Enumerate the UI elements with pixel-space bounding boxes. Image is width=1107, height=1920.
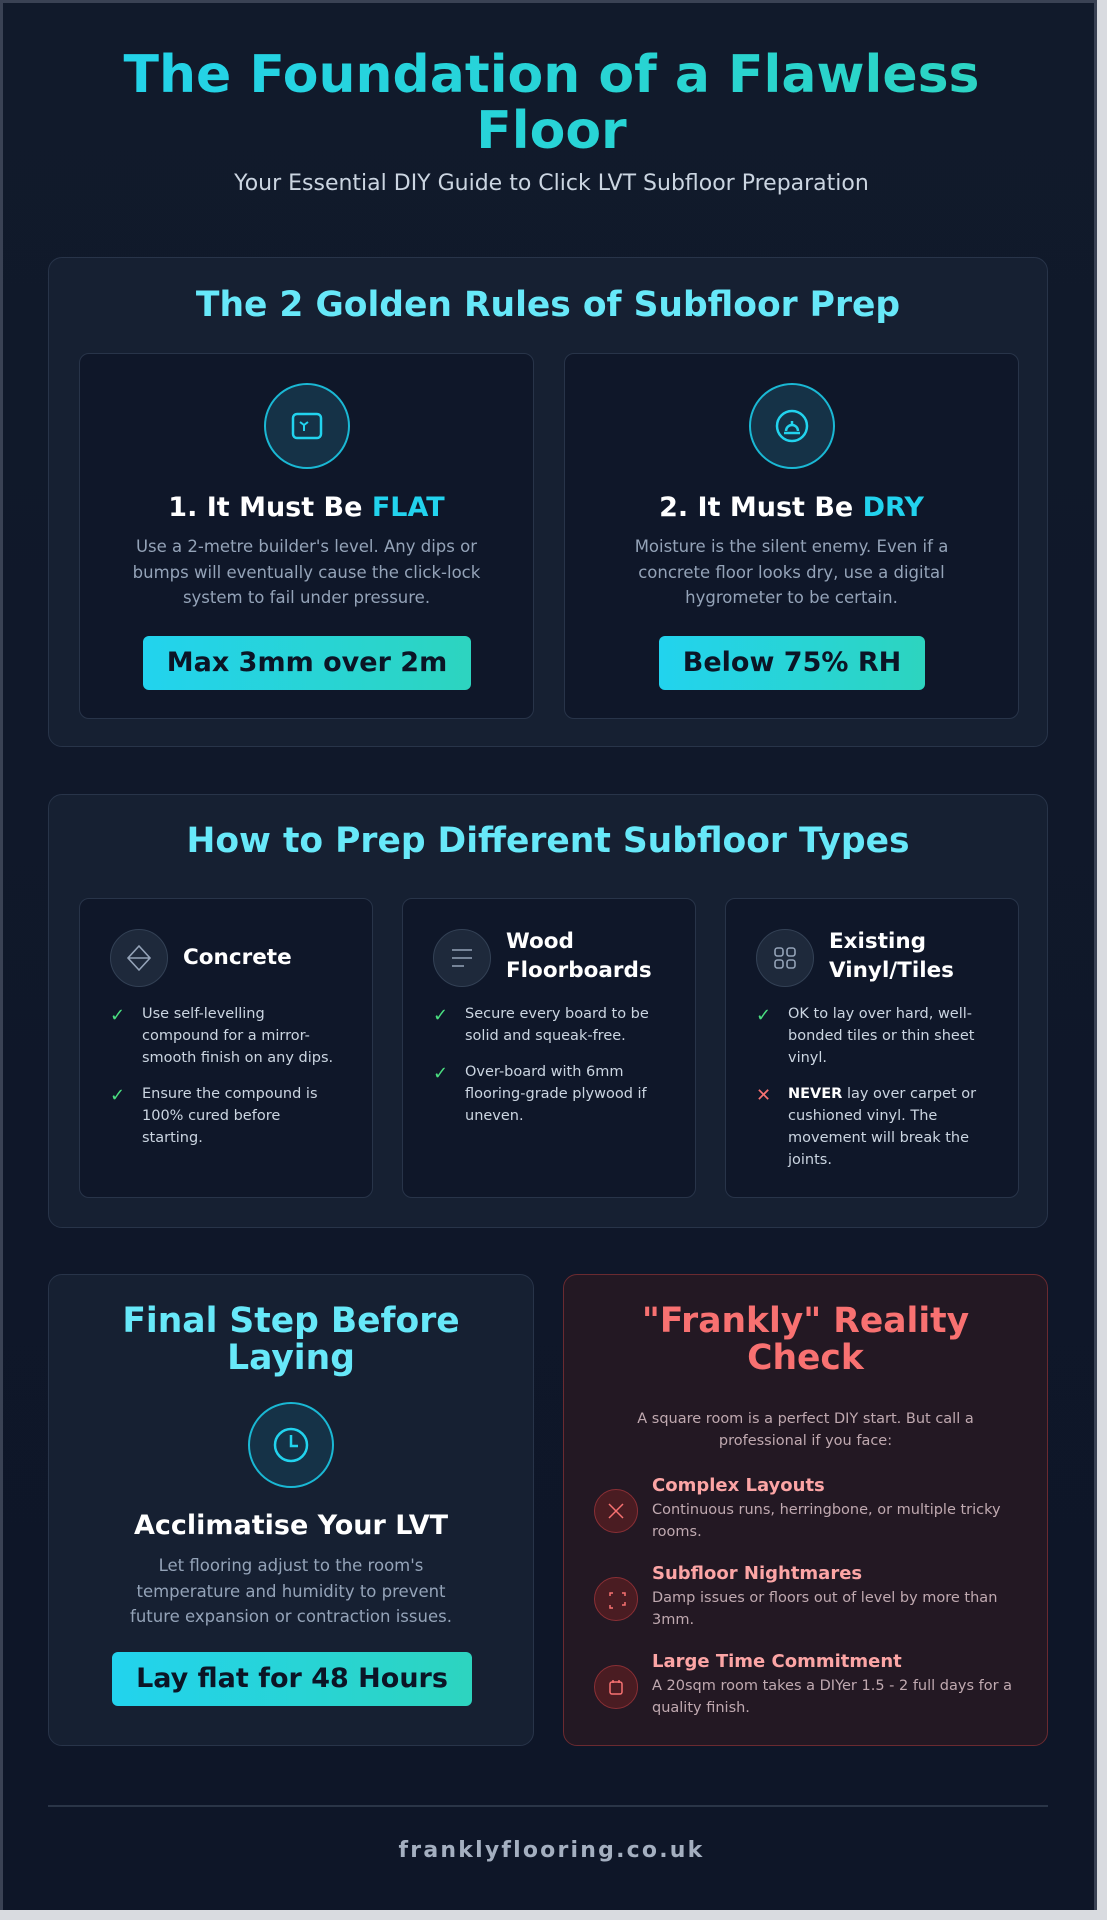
card: wood: ✓ (433, 1005, 448, 1026)
text: acclimatise: Let flooring adjust to the room's temperature and humidity to prevent future expansion or contraction issues. (130, 1556, 452, 1626)
card: dry (564, 353, 1019, 719)
title: vinyl: Vinyl/Tiles (829, 958, 954, 983)
heading: golden rules: The 2 Golden Rules of Subfloor Prep (196, 285, 900, 325)
item: Use self-levelling compound for a mirror-smooth finish on any dips. (142, 1006, 333, 1066)
heading: final step (122, 1301, 460, 1378)
icon: hygrometer (749, 383, 835, 469)
item: complex layouts: Continuous runs, herringbone, or multiple tricky rooms. (652, 1502, 1001, 1540)
badge: 75%: Below 75% RH (683, 647, 901, 678)
card: vinyl: ✕ (756, 1085, 771, 1106)
card: flat (79, 353, 534, 719)
card: concrete: ✓ (110, 1085, 125, 1106)
badge: 3mm: Max 3mm over 2m (167, 647, 447, 678)
card: concrete (79, 898, 373, 1198)
title (3, 47, 1100, 159)
item: time commitment (594, 1651, 1012, 1716)
badge: 3mm (143, 636, 471, 690)
item: Secure every board to be solid and squeak-free. (465, 1006, 649, 1044)
title: Floor (476, 101, 627, 161)
text: flat: Use a 2-metre builder's level. Any dips or bumps will eventually cause the click-lock system to fail under pressure. (133, 537, 480, 607)
title: wood (506, 929, 652, 983)
item: complex layouts: Complex Layouts (652, 1475, 825, 1496)
item: time commitment: A 20sqm room takes a DIYer 1.5 - 2 full days for a quality finish. (652, 1678, 1012, 1716)
item: NEVER lay over carpet or cushioned vinyl. The movement will break the joints. (788, 1086, 976, 1168)
heading: reality check (642, 1301, 969, 1378)
heading: reality check: "Frankly" Reality (642, 1301, 969, 1341)
title: vinyl (829, 929, 954, 983)
text: intro: A square room is a perfect DIY start. But call a professional if you face: (637, 1411, 974, 1449)
item: time commitment: Large Time Commitment (652, 1651, 902, 1672)
title: The Foundation of a Flawless (124, 45, 980, 105)
heading: final step: Laying (227, 1338, 355, 1378)
title: wood: Floorboards (506, 958, 652, 983)
heading: final step: Final Step Before (122, 1301, 460, 1341)
card: vinyl: ✓ (756, 1005, 771, 1026)
panel: reality check (563, 1274, 1048, 1746)
item: OK to lay over hard, well-bonded tiles or thin sheet vinyl. (788, 1006, 974, 1066)
title: vinyl: Existing (829, 929, 926, 954)
panel: final step (48, 1274, 534, 1746)
footer: franklyflooring.co.uk (399, 1838, 704, 1863)
heading: acclimatise: Acclimatise Your LVT (134, 1510, 448, 1541)
item: complex layouts (594, 1475, 1001, 1540)
badge: 48 hours (112, 1652, 472, 1706)
icon: tiles (756, 929, 814, 987)
item: subfloor nightmares: Damp issues or floors out of level by more than 3mm. (652, 1590, 997, 1628)
icon: wood (433, 929, 491, 987)
text: dry: Moisture is the silent enemy. Even if a concrete floor looks dry, use a digital hygrometer to be certain. (635, 537, 948, 607)
badge: 75% (659, 636, 925, 690)
item: subfloor nightmares (594, 1563, 997, 1628)
panel: subfloor types (48, 794, 1048, 1228)
card: wood: ✓ (433, 1063, 448, 1084)
panel: golden rules (48, 257, 1048, 747)
item: subfloor nightmares: Subfloor Nightmares (652, 1563, 862, 1584)
card: vinyl (725, 898, 1019, 1198)
card: wood (402, 898, 696, 1198)
title: wood: Wood (506, 929, 574, 954)
title: concrete: Concrete (183, 945, 292, 970)
badge: 48 hours: Lay flat for 48 Hours (136, 1663, 448, 1694)
card: concrete: ✓ (110, 1005, 125, 1026)
item: Over-board with 6mm flooring-grade plywood if uneven. (465, 1064, 647, 1124)
subtitle: Your Essential DIY Guide to Click LVT Subfloor Preparation (234, 171, 869, 196)
icon: concrete (110, 929, 168, 987)
heading: dry: 2. It Must Be DRY (659, 492, 924, 523)
heading: subfloor types: How to Prep Different Subfloor Types (186, 821, 910, 861)
icon: level (264, 383, 350, 469)
item: Ensure the compound is 100% cured before starting. (142, 1086, 318, 1146)
heading: reality check: Check (747, 1338, 864, 1378)
icon: clock (248, 1402, 334, 1488)
heading: flat: 1. It Must Be FLAT (168, 492, 445, 523)
